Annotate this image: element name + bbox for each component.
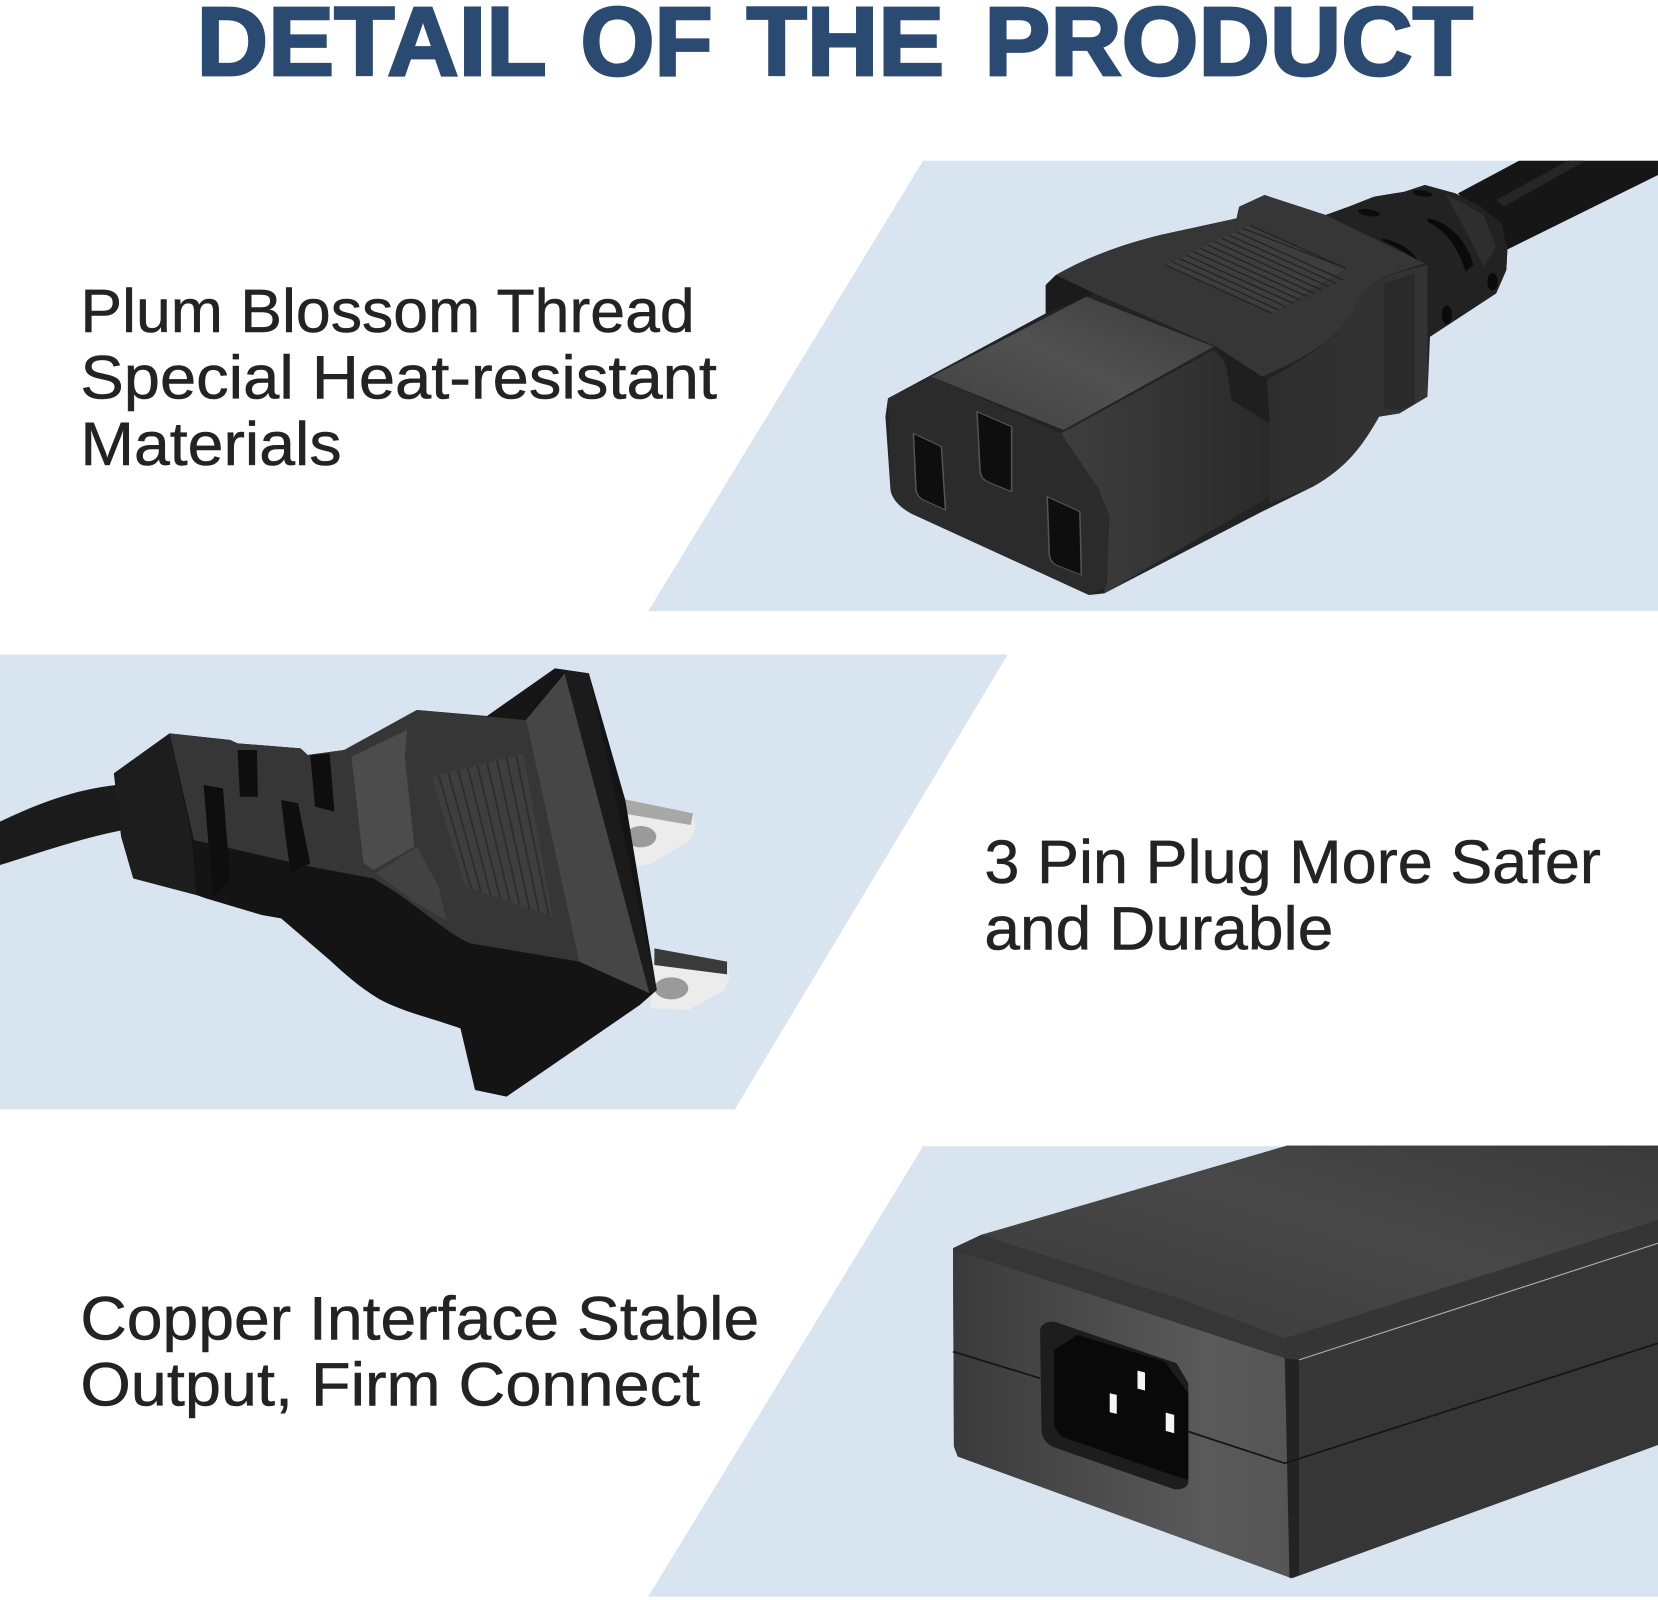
strain relief	[1326, 185, 1507, 337]
image: C13 power connector	[885, 161, 1658, 595]
ridged grip	[1165, 225, 1346, 313]
panel background: connector	[648, 161, 1658, 611]
text: 3 pin plug	[984, 827, 1601, 963]
panel: power connector	[80, 161, 1658, 611]
text: copper interface: Copper Interface Stable	[80, 1284, 759, 1353]
socket inner	[1054, 1335, 1188, 1480]
title	[197, 0, 1473, 96]
lighter shoulder block	[351, 730, 414, 870]
rear body	[1046, 195, 1427, 503]
side face	[1285, 1243, 1658, 1578]
socket slot: centre	[977, 412, 1012, 492]
text: plum blossom thread	[80, 276, 717, 478]
image: two-prong wall plug	[0, 668, 729, 1097]
ridged grip	[431, 753, 553, 917]
text: 3 pin plug: and Durable	[984, 894, 1333, 963]
sleeve side face	[1061, 350, 1270, 593]
socket pins	[1110, 1371, 1174, 1433]
panel background: plug	[0, 655, 1008, 1109]
connector front face	[888, 377, 1109, 595]
text: copper interface	[80, 1284, 759, 1418]
prong: bottom	[650, 948, 729, 1010]
sleeve top face	[931, 297, 1214, 430]
text: plum blossom thread: Plum Blossom Thread	[80, 276, 695, 345]
socket recess	[1040, 1322, 1188, 1489]
top face	[953, 1146, 1658, 1360]
flange	[487, 668, 657, 993]
text: 3 pin plug: 3 Pin Plug More Safer	[984, 827, 1601, 896]
socket slot: left	[913, 433, 945, 510]
highlight edge	[1299, 1243, 1658, 1360]
front face	[953, 1249, 1292, 1578]
panel background: adapter	[648, 1146, 1658, 1597]
cable	[0, 785, 141, 865]
top bevel	[1285, 1220, 1658, 1360]
text: copper interface: Output, Firm Connect	[80, 1349, 700, 1418]
grip slots	[204, 750, 334, 897]
panel: power adapter	[80, 1146, 1658, 1597]
panel: wall plug	[0, 655, 1601, 1109]
image: power adapter brick	[953, 1146, 1658, 1578]
seam	[953, 1343, 1658, 1463]
text: plum blossom thread: Materials	[80, 409, 342, 478]
text: plum blossom thread: Special Heat-resistant	[80, 343, 717, 412]
cable	[1458, 161, 1658, 250]
socket slot: right	[1047, 497, 1081, 575]
prong: top	[620, 798, 696, 867]
connector silhouette	[885, 185, 1507, 595]
collar	[114, 710, 579, 962]
adapter silhouette	[953, 1146, 1658, 1578]
plug silhouette	[114, 668, 657, 1097]
